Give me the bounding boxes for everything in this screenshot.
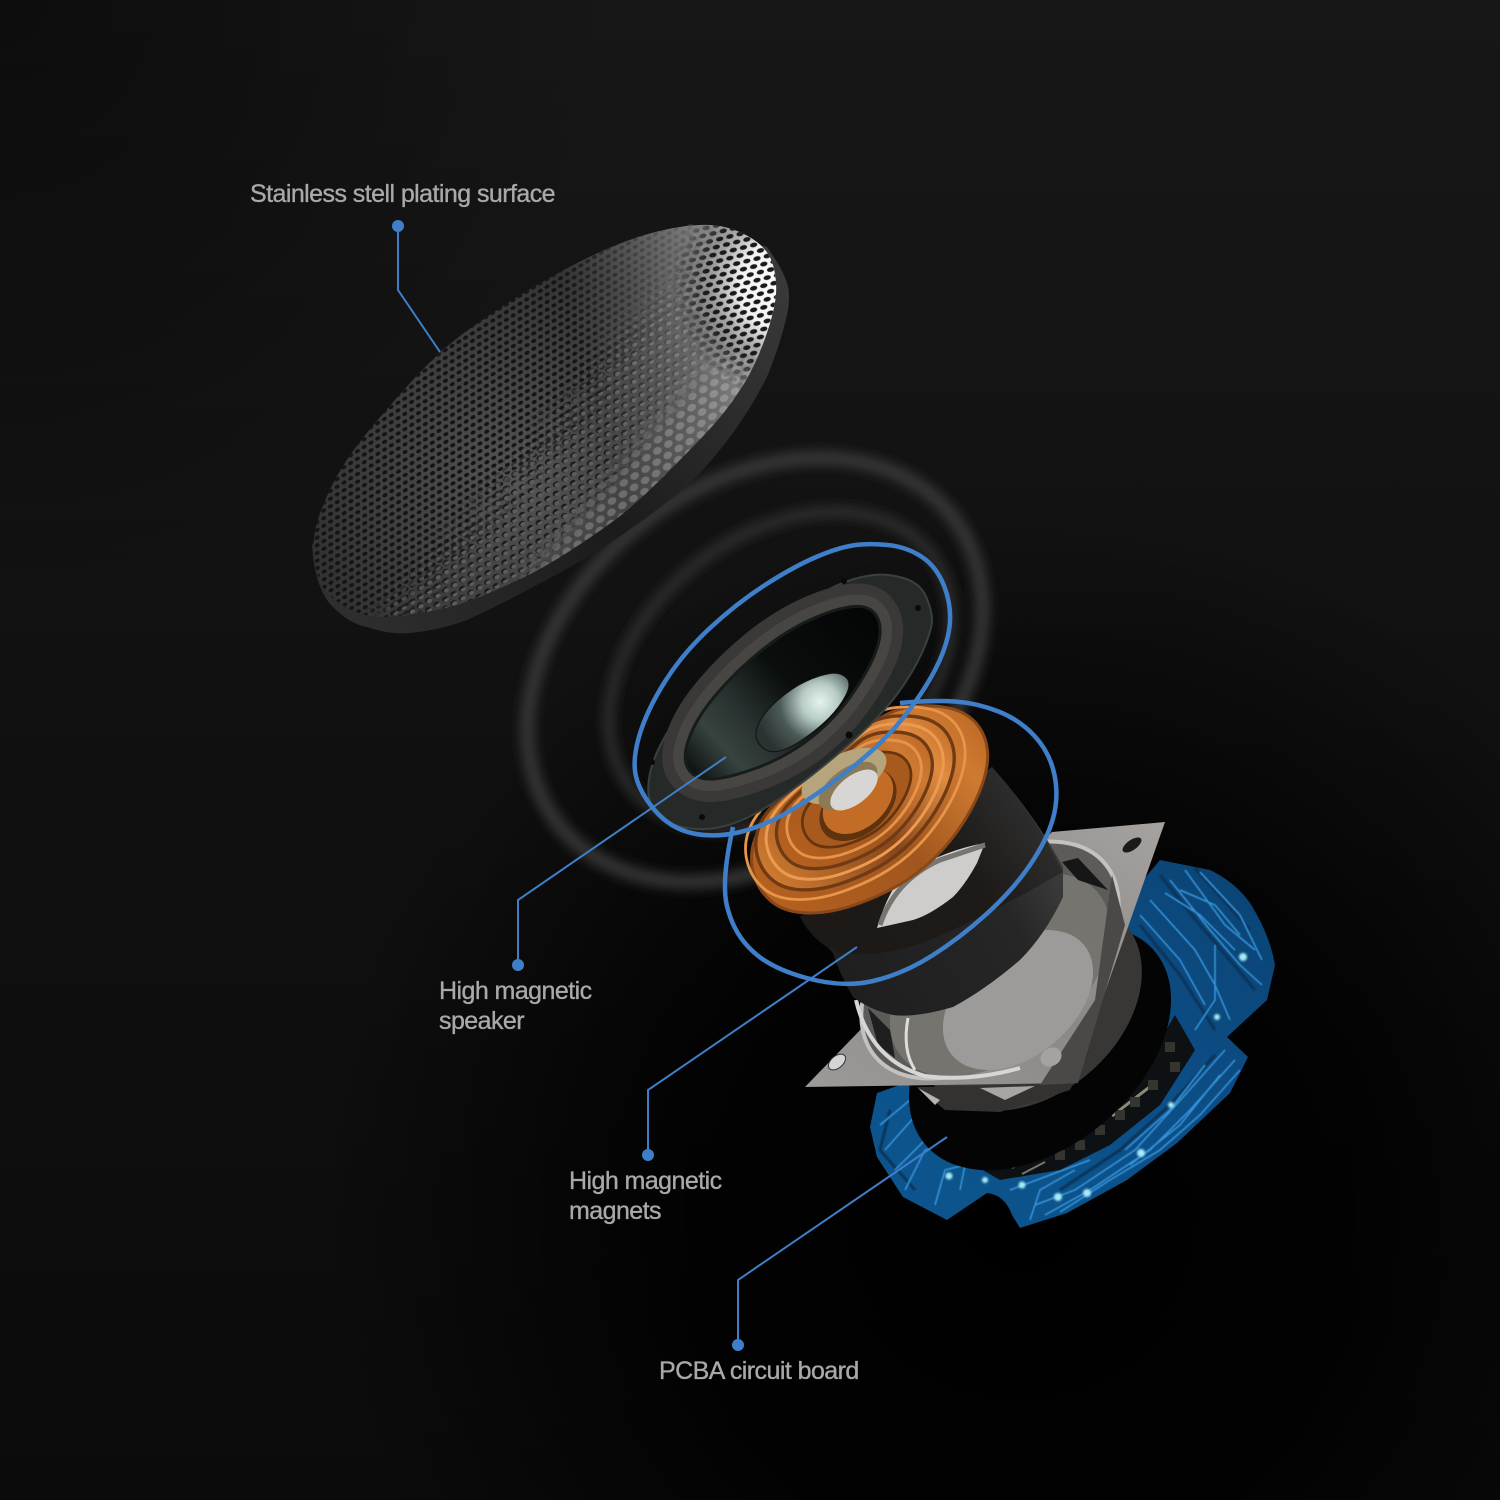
speaker highlight ring xyxy=(635,544,950,835)
callout: magnets xyxy=(569,947,857,1225)
magnet cylinder xyxy=(800,767,1063,1016)
dust cap xyxy=(756,673,849,752)
callout: magnets: High magnetic xyxy=(569,1167,722,1195)
steel mesh grille xyxy=(312,224,789,634)
sound waves xyxy=(444,370,1066,970)
magnet highlight ring xyxy=(725,701,1056,984)
leader line: speaker xyxy=(518,757,726,965)
callout: magnets: magnets xyxy=(569,1197,661,1225)
circuit board xyxy=(870,860,1275,1228)
callout: stainless steel surface: Stainless stell plating surface xyxy=(250,180,555,208)
metal frame lower body xyxy=(876,856,1184,1154)
outer basket rim xyxy=(648,575,932,829)
callout: stainless steel surface xyxy=(250,180,555,352)
callout: speaker: High magnetic xyxy=(439,977,592,1005)
leader line: magnets xyxy=(648,947,857,1155)
grille rim xyxy=(312,224,789,633)
speaker driver xyxy=(648,575,932,829)
callout: speaker: speaker xyxy=(439,1007,524,1035)
leader line: steel surface xyxy=(398,226,440,352)
chip components xyxy=(965,1015,1195,1180)
glowing solder points xyxy=(946,953,1247,1201)
metal mounting plate xyxy=(805,795,1165,1125)
leader line: circuit board xyxy=(738,1137,947,1345)
callout: circuit board: PCBA circuit board xyxy=(659,1357,859,1385)
surround xyxy=(685,606,880,779)
grille face xyxy=(314,224,776,617)
lower black magnet xyxy=(862,877,1218,1219)
callout: circuit board xyxy=(659,1137,947,1385)
cone xyxy=(685,606,880,779)
callout: speaker xyxy=(439,757,726,1035)
copper pole piece xyxy=(745,706,988,913)
